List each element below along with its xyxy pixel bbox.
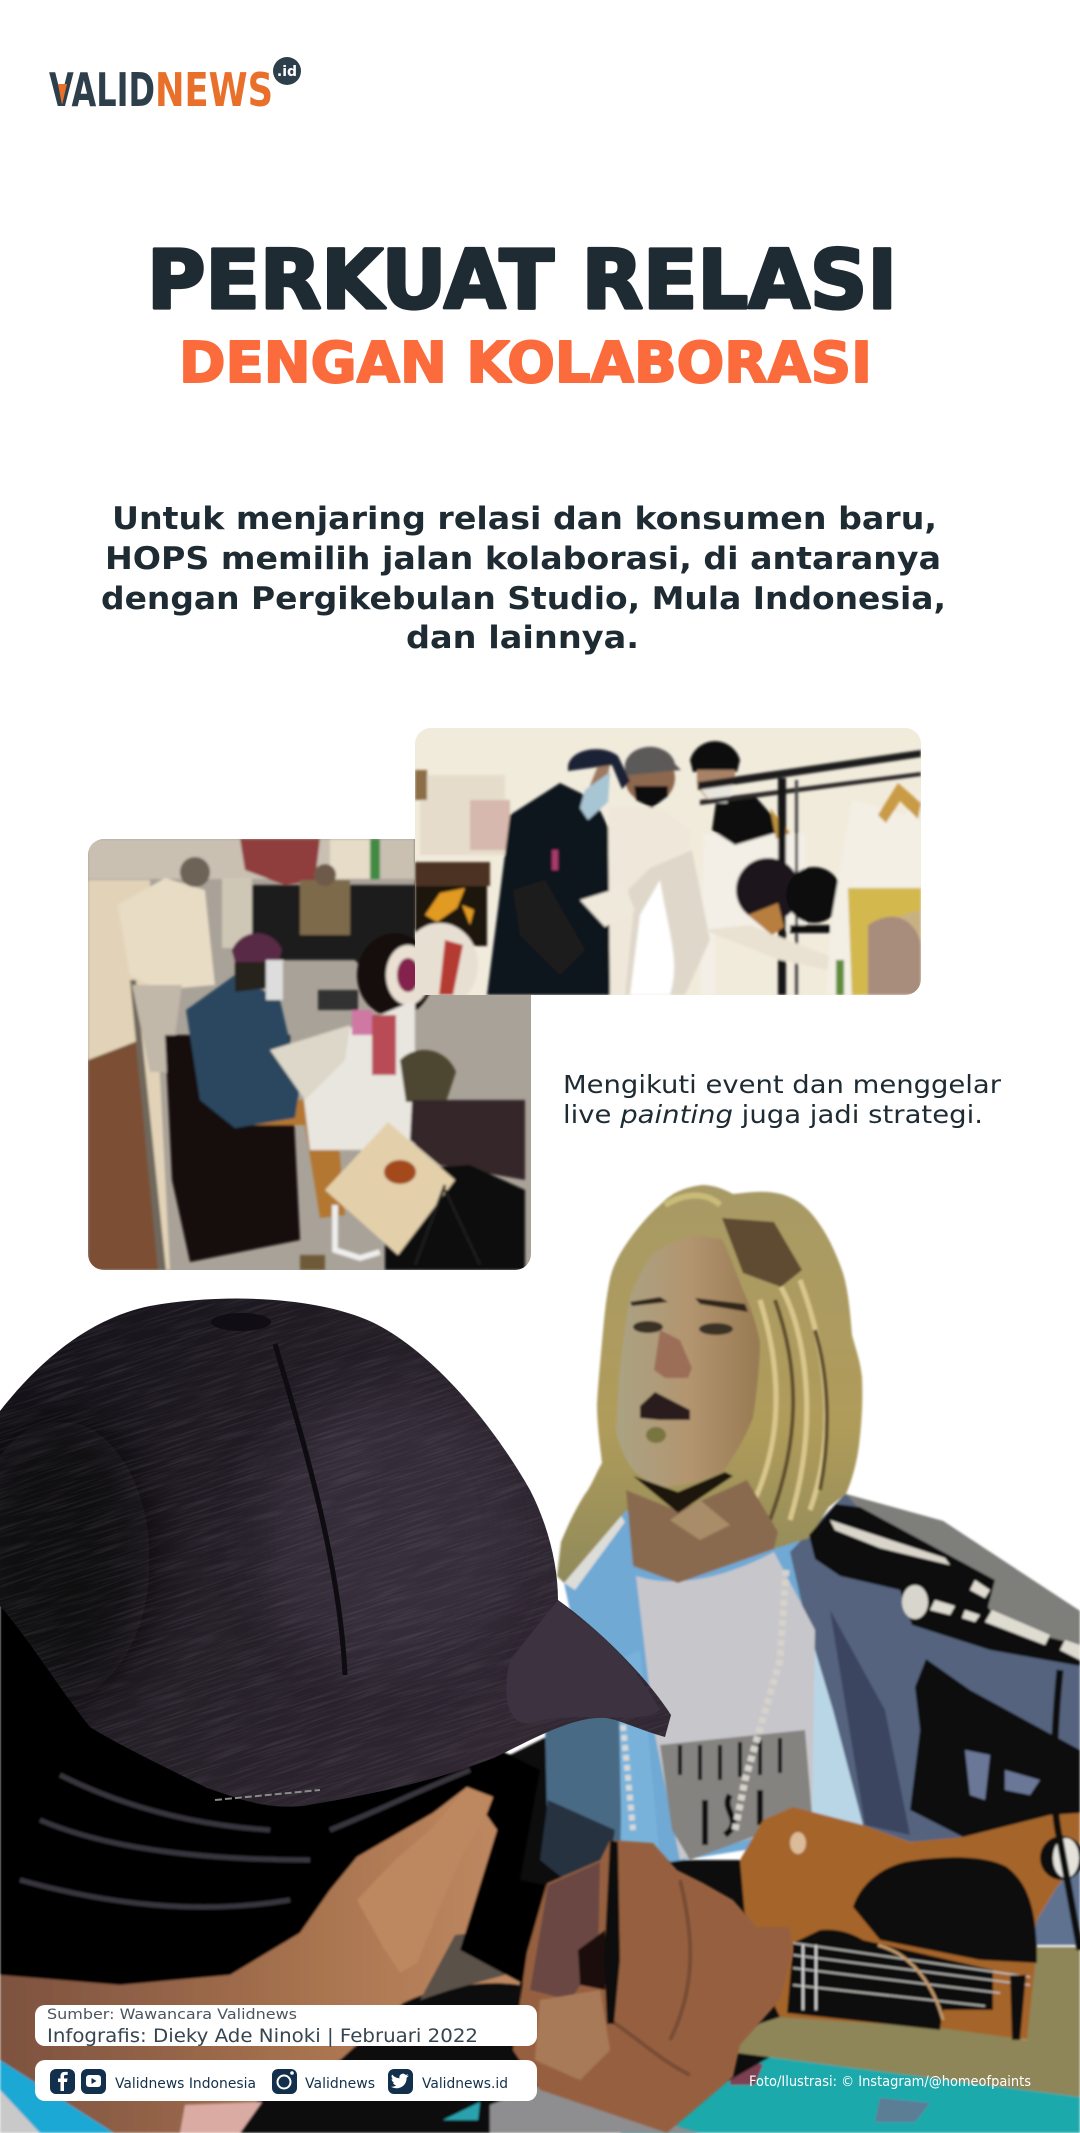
torso backdrop [564,1490,870,1870]
logo: Validnews.id: .id [277,64,297,80]
photo: visitors at clothing rack [402,728,921,1007]
photo credit: Foto/Ilustrasi: © Instagram/@homeofpaints [749,2074,1031,2090]
logo: Validnews.id [49,57,301,117]
lower mic and dark shadow [910,1659,1080,1837]
icon: twitter [388,2069,413,2094]
icon: youtube [81,2069,106,2094]
face [616,1235,760,1487]
guitar [740,1807,1080,2040]
social media bar: Validnews.id [422,2076,508,2092]
logo: Validnews.id: NEWS [155,63,273,117]
credits box: Infografis: Dieky Ade Ninoki | Februari 2022 [47,2025,478,2047]
icon: instagram [272,2069,297,2094]
intro text: HOPS memilih jalan kolaborasi, di antaranya [105,541,941,577]
caption text [563,1070,1002,1129]
social media bar: Validnews [305,2076,375,2092]
logo: Validnews.id: VALID [49,63,155,117]
painter: corduroy cap [0,1298,671,1807]
microphone [809,1504,1080,1666]
title [147,234,897,396]
caption text: Mengikuti event dan menggelar [563,1070,1002,1099]
title: DENGAN KOLABORASI [179,331,872,396]
icon: facebook [50,2069,75,2094]
jacket [545,1700,625,1880]
caption text: live painting juga jadi strategi. [563,1100,983,1129]
social media bar [35,2060,537,2101]
hand [513,1840,793,2133]
credits box [35,2005,537,2047]
title: PERKUAT RELASI [147,234,897,328]
mural: painted musician with guitar [500,1185,1080,2133]
intro text [101,501,946,656]
credits box: Sumber: Wawancara Validnews [47,2007,297,2023]
teal floor [620,2040,1080,2133]
photo: live painting at event [88,839,531,1270]
back layer behind hand [500,1700,800,2090]
intro text: dan lainnya. [406,620,639,656]
t-shirt [636,1552,815,1860]
hair [557,1185,862,1583]
intro text: Untuk menjaring relasi dan konsumen baru, [112,501,937,537]
social media bar: Validnews Indonesia [115,2076,256,2092]
painter: hair, ear, hand and skin [0,1600,793,2133]
overshirt [618,1650,660,1860]
neck [626,1480,778,1583]
intro text: dengan Pergikebulan Studio, Mula Indonesia, [101,581,946,617]
